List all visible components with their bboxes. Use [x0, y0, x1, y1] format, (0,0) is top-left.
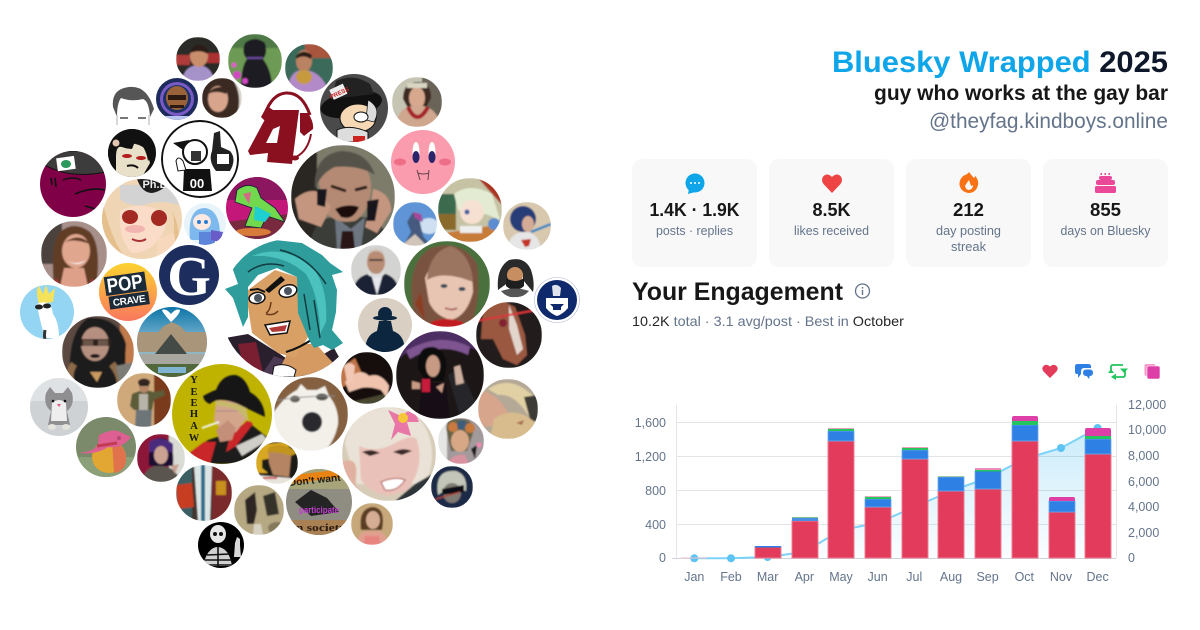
avatar: woman smiling with brown hair	[41, 221, 107, 287]
avatar: navy eagle badge	[534, 278, 580, 322]
avatar: anime girl pale green hair	[438, 178, 502, 242]
avatar: silhouette on beige	[358, 298, 412, 352]
avatar cluster	[20, 34, 580, 568]
right axis labels: 0	[1128, 551, 1135, 565]
bar: May	[828, 428, 854, 558]
legend	[1042, 364, 1160, 380]
stat value: 8.5K	[812, 200, 850, 220]
month labels: Aug	[940, 570, 962, 584]
legend icon: likes	[1042, 365, 1058, 378]
avatar: dark-haired woman red background	[137, 434, 185, 482]
stat label: day posting	[936, 223, 1001, 238]
month labels: Sep	[976, 570, 999, 584]
avatar: pink hat on peach	[76, 417, 136, 477]
avatar: maroon headset logo	[248, 93, 313, 164]
avatar: meme I don't want to participate in society: in society	[292, 523, 346, 534]
line points	[690, 424, 1102, 562]
avatar: colorful abstract painting	[176, 465, 232, 521]
bar: Jan	[681, 558, 707, 559]
icon: flame	[959, 172, 978, 193]
avatar: woman with dark curls	[202, 78, 242, 118]
stat label: likes received	[794, 223, 869, 238]
avatar: meme I don't want to participate in society: participate	[299, 505, 339, 515]
left axis labels: 400	[645, 518, 666, 532]
bars	[681, 416, 1111, 558]
avatar: meme I don't want to participate in society: Don't want	[288, 473, 342, 489]
month labels: May	[829, 570, 854, 584]
avatar: man in olive jacket	[117, 373, 171, 427]
avatar: dog with glasses	[274, 377, 348, 451]
panel: likes received	[769, 159, 894, 267]
month labels: Feb	[720, 570, 742, 584]
avatar: crying anime girl in Ph.D cap: Ph.D	[142, 179, 168, 191]
avatar: cowboy Yeehaw portrait: A	[190, 421, 198, 432]
legend icon: quotes	[1144, 364, 1160, 379]
avatar: burnt parchment figure	[234, 485, 286, 535]
avatar: Pop Crave: POP	[106, 271, 144, 298]
engagement summary: 10.2K total · 3.1 avg/post · Best in October	[632, 313, 904, 329]
avatar: skeleton thumbs up	[198, 522, 244, 568]
handle: @theyfag.kindboys.online	[929, 110, 1168, 133]
avatar: woman in coral top	[351, 503, 393, 545]
month labels: Jun	[868, 570, 888, 584]
stat value: 212	[953, 200, 984, 220]
bar: Aug	[938, 476, 964, 558]
avatar: white-haired masked figure	[431, 466, 473, 508]
right axis labels: 12,000	[1128, 398, 1166, 412]
bar: Jun	[865, 496, 891, 558]
icon: info	[856, 284, 870, 298]
avatar: man in lilac shirt	[176, 37, 220, 81]
avatar: cowboy Yeehaw portrait: H	[190, 409, 198, 420]
avatar: teal-haired comic character	[225, 240, 343, 377]
avatar: Pop Crave	[99, 263, 157, 321]
avatar: woman with flower crown	[438, 418, 484, 465]
left axis labels: 800	[645, 484, 666, 498]
avatar: blue-haired chibi	[184, 203, 226, 245]
avatar: man in yellow cap	[256, 442, 298, 484]
stat label: streak	[951, 239, 986, 254]
avatar: blue afro with superman shirt	[503, 202, 551, 250]
avatar: cowboy Yeehaw portrait: E	[190, 387, 198, 398]
right axis labels	[1128, 398, 1166, 565]
legend icon: reposts	[1108, 365, 1128, 380]
month labels: Apr	[795, 570, 814, 584]
avatar: green dinosaur on magenta	[226, 177, 288, 239]
stat label	[936, 223, 1001, 254]
left axis labels: 0	[659, 551, 666, 565]
left axis labels: 1,200	[635, 450, 666, 464]
month labels: Dec	[1086, 570, 1109, 584]
bar: Dec	[1085, 428, 1111, 558]
chart: monthly engagement	[635, 398, 1166, 584]
avatar: cowboy Yeehaw portrait: E	[190, 398, 198, 409]
icon: chat bubble	[686, 174, 704, 194]
avatar: Louvre pyramid with butterfly	[137, 307, 207, 377]
avatar: young woman with auburn hair	[404, 241, 490, 327]
right axis labels: 4,000	[1128, 500, 1159, 514]
right axis labels: 6,000	[1128, 475, 1159, 489]
avatar: woman with dark hair and red cup	[396, 331, 484, 419]
avatar: goth anime girl	[108, 129, 156, 177]
avatar: blue sky figure	[393, 202, 439, 246]
avatar: crying anime girl in Ph.D cap	[102, 179, 182, 259]
avatar: cowboy Yeehaw portrait: W	[189, 433, 200, 444]
avatar: pale woman with bow	[342, 407, 436, 501]
bar: Sep	[975, 468, 1001, 558]
stat label: posts · replies	[656, 223, 733, 238]
bar: Jul	[902, 447, 928, 558]
avatar: cartoon bearded man	[496, 259, 534, 297]
avatar: man holding burger	[285, 44, 333, 92]
cumulative line area	[694, 428, 1098, 558]
panel: days on Bluesky	[1043, 159, 1168, 267]
grid lines	[672, 405, 1116, 558]
month labels: Jan	[684, 570, 704, 584]
avatar: woman with red necklace	[392, 77, 442, 127]
month labels: Mar	[757, 570, 778, 584]
month labels: Nov	[1050, 570, 1073, 584]
bar: Mar	[755, 546, 781, 558]
panel: day posting streak	[906, 159, 1031, 267]
avatar: older man with glasses	[351, 245, 401, 295]
avatar: white badge football mascot	[162, 121, 238, 197]
avatar: blonde woman with cat	[478, 379, 538, 439]
avatar: cowboy Yeehaw portrait: Y	[190, 375, 198, 386]
icon: heart	[822, 174, 842, 193]
heading: Your Engagement: Your Engagement	[632, 278, 844, 306]
month labels: Jul	[906, 570, 922, 584]
panel: posts and replies	[632, 159, 757, 267]
icon: cake	[1095, 173, 1116, 193]
left axis labels: 1,600	[635, 416, 666, 430]
right axis labels: 10,000	[1128, 423, 1166, 437]
avatar: meme I don't want to participate in society	[286, 469, 352, 535]
avatar: helmeted figure	[156, 78, 198, 120]
avatar: white badge football mascot: 00	[190, 176, 204, 191]
avatar: cowboy Yeehaw portrait	[172, 364, 272, 464]
avatar: line-art man	[112, 86, 154, 128]
avatar: pink piglet	[341, 352, 393, 404]
stat value: 1.4K · 1.9K	[650, 200, 740, 220]
avatar: cartoon in press hat: PRESS	[329, 87, 350, 101]
cumulative line	[694, 428, 1098, 558]
avatar: Kirby	[391, 130, 455, 194]
left axis labels	[635, 416, 666, 565]
avatar: cockatoo with sunglasses	[20, 285, 74, 339]
bar: Nov	[1049, 497, 1075, 558]
title: Bluesky Wrapped 2025	[832, 46, 1168, 79]
avatar: navy G logo: G	[167, 246, 211, 308]
avatar: horse with laser eyes	[476, 301, 542, 368]
avatar: Pop Crave: CRAVE	[112, 294, 147, 309]
month labels	[684, 570, 1109, 584]
avatar: purple cartoon with cap	[40, 151, 106, 217]
bar: Apr	[792, 517, 818, 558]
display name: guy who works at the gay bar	[874, 82, 1168, 105]
stat value: 855	[1090, 200, 1121, 220]
avatar: gray plush toy	[30, 378, 88, 436]
month labels: Oct	[1015, 570, 1035, 584]
legend icon: replies	[1075, 364, 1093, 379]
avatar: black dog on grass	[228, 34, 282, 88]
avatar: angry man on phone	[291, 145, 395, 249]
bar: Oct	[1012, 416, 1038, 558]
avatar: goth woman in glasses	[62, 316, 134, 388]
right axis labels: 8,000	[1128, 449, 1159, 463]
stat label: days on Bluesky	[1060, 223, 1151, 238]
right axis labels: 2,000	[1128, 526, 1159, 540]
avatar: cartoon in press hat	[319, 74, 388, 142]
